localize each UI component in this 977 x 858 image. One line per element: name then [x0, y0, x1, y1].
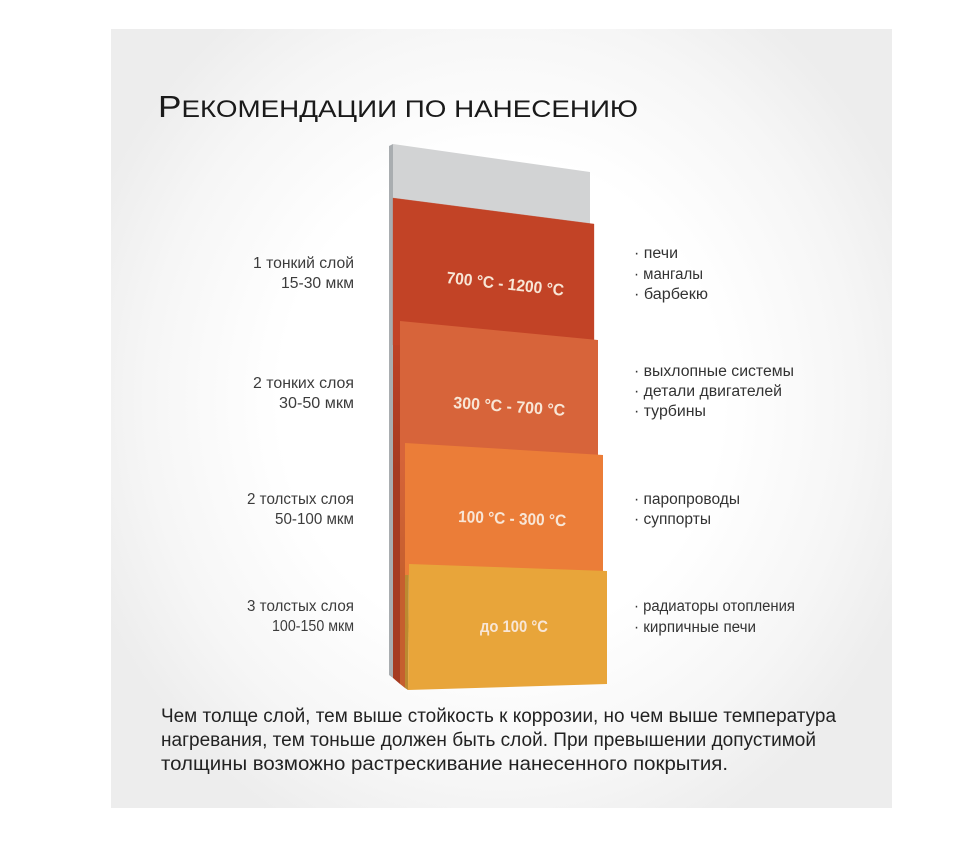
- right list: radiators and brick furnaces: · кирпичные печи: [634, 619, 756, 636]
- layer 1: 700-1200 °C: [393, 198, 594, 684]
- right list: steam pipes and supports: · суппорты: [634, 511, 711, 528]
- left label: 2 thin layers: [253, 375, 354, 412]
- right list: steam pipes and supports: · паропроводы: [634, 491, 740, 508]
- left label: 1 thin layer: 15-30 мкм: [281, 275, 354, 292]
- layered coating diagram: [389, 144, 607, 690]
- layer 2: 300-700 °C: [400, 321, 598, 688]
- label: up to 100 °C: до 100 °C: [480, 618, 548, 636]
- label: 700-1200 °C: 700 °C - 1200 °C: [446, 269, 565, 300]
- background panel: [111, 29, 892, 808]
- left label: 2 thick layers: 50-100 мкм: [275, 511, 354, 528]
- label: 100-300 °C: 100 °C - 300 °C: [458, 508, 567, 530]
- layer 4: up to 100 °C: [408, 564, 607, 690]
- bottom note: [161, 706, 836, 775]
- right list: steam pipes and supports: [634, 491, 740, 528]
- label: 300-700 °C: 300 °C - 700 °C: [453, 394, 566, 420]
- right list: furnaces and grills: · барбекю: [634, 286, 708, 303]
- left label: 2 thin layers: 30-50 мкм: [279, 395, 354, 412]
- right list: furnaces and grills: [634, 245, 708, 303]
- title: РЕКОМЕНДАЦИИ ПО НАНЕСЕНИЮ: [158, 89, 638, 124]
- bottom note: толщины возможно растрескивание нанесенного покрытия.: [161, 754, 728, 775]
- right list: exhaust systems and engines: [634, 363, 794, 420]
- layer 3: 100-300 °C: [405, 443, 603, 690]
- left label: 1 thin layer: [253, 255, 354, 292]
- bottom note: Чем толще слой, тем выше стойкость к коррозии, но чем выше температура: [161, 706, 836, 727]
- right list: furnaces and grills: · печи: [634, 245, 678, 262]
- bottom note: нагревания, тем тоньше должен быть слой. При превышении допустимой: [161, 730, 816, 751]
- left label: 2 thick layers: [247, 491, 354, 528]
- right list: exhaust systems and engines: · турбины: [634, 403, 706, 420]
- left label: 1 thin layer: 1 тонкий слой: [253, 255, 354, 272]
- left label: 2 thick layers: 2 толстых слоя: [247, 491, 354, 508]
- left label: 3 thick layers: [247, 598, 354, 635]
- left label: 2 thin layers: 2 тонких слоя: [253, 375, 354, 392]
- right list: furnaces and grills: · мангалы: [634, 266, 703, 283]
- right list: radiators and brick furnaces: [634, 598, 795, 636]
- right list: radiators and brick furnaces: · радиаторы отопления: [634, 598, 795, 615]
- right list: exhaust systems and engines: · детали двигателей: [634, 383, 782, 400]
- grey base sheet: [389, 144, 590, 678]
- left label: 3 thick layers: 3 толстых слоя: [247, 598, 354, 615]
- right list: exhaust systems and engines: · выхлопные системы: [634, 363, 794, 380]
- left label: 3 thick layers: 100-150 мкм: [272, 618, 354, 635]
